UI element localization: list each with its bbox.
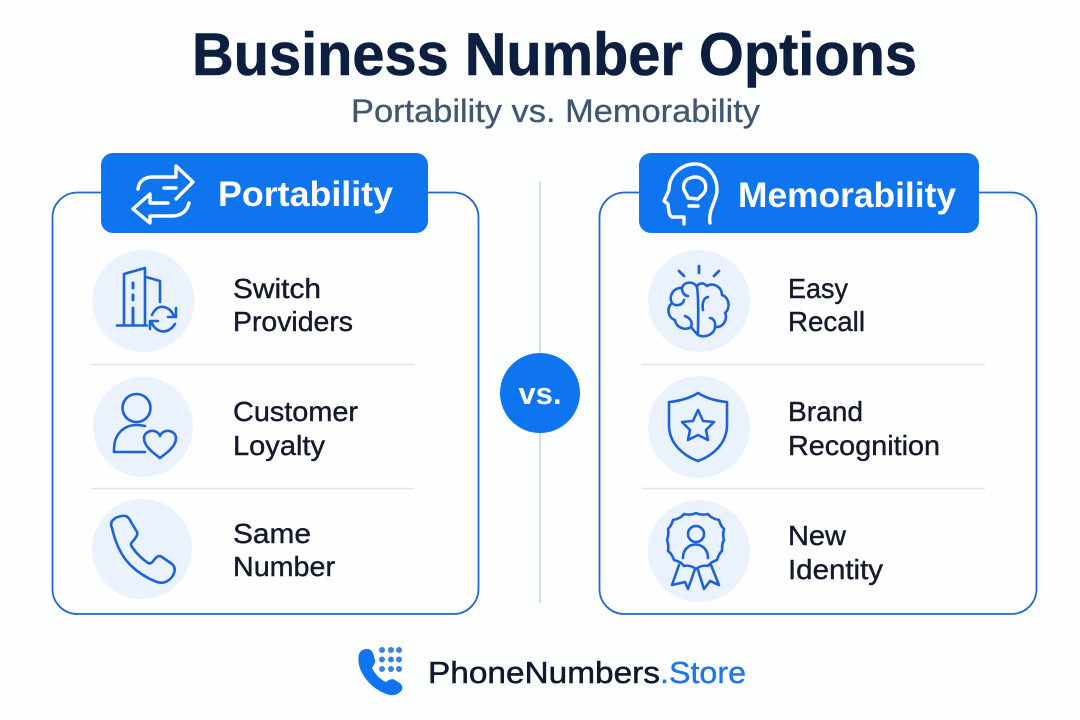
memorability heading: Memorability: [738, 176, 957, 215]
row: new identity: [648, 500, 883, 602]
vs badge: vs.: [518, 376, 562, 411]
icon: phone handset: [111, 516, 175, 583]
row: easy recall: Recall: [788, 306, 865, 337]
row: switch providers: Switch: [233, 273, 321, 304]
vs badge: [500, 353, 580, 433]
row: switch providers: [92, 250, 353, 352]
icon: head with lightbulb: [664, 164, 717, 224]
portability heading: Portability: [218, 175, 394, 214]
row: customer loyalty: [93, 377, 358, 477]
row: new identity: New: [788, 520, 847, 551]
row: brand recognition: Brand: [788, 396, 863, 427]
title: Business Number Options: [192, 21, 917, 88]
row: brand recognition: Recognition: [788, 430, 940, 461]
icon: phone with keypad: [358, 647, 402, 695]
row: easy recall: Easy: [788, 273, 848, 304]
memorability header badge: [639, 153, 979, 233]
icon: swap arrows: [133, 166, 193, 223]
panel: portability: [52, 153, 478, 614]
row: same number: [92, 499, 335, 599]
footer logo: .Store: [660, 655, 746, 690]
row: brand recognition: [648, 376, 940, 478]
row: same number: Number: [233, 551, 335, 582]
icon: brain: [668, 266, 729, 336]
row: new identity: Identity: [788, 554, 883, 585]
icon: person with heart: [114, 394, 176, 458]
row: customer loyalty: Customer: [233, 396, 358, 427]
subtitle: Portability vs. Memorability: [351, 93, 760, 129]
icon: building with sync: [117, 268, 176, 331]
row: easy recall: [648, 250, 865, 352]
portability header badge: [101, 153, 428, 233]
icon: award ribbon with person: [667, 513, 724, 589]
row: same number: Same: [233, 518, 311, 549]
icon: shield with star: [669, 393, 727, 461]
row: customer loyalty: Loyalty: [233, 430, 325, 461]
brand name: PhoneNumbers: [428, 655, 660, 690]
panel: memorability: [600, 153, 1036, 614]
row: switch providers: Providers: [233, 306, 353, 337]
center divider line: [539, 182, 541, 603]
footer logo: [358, 647, 746, 695]
